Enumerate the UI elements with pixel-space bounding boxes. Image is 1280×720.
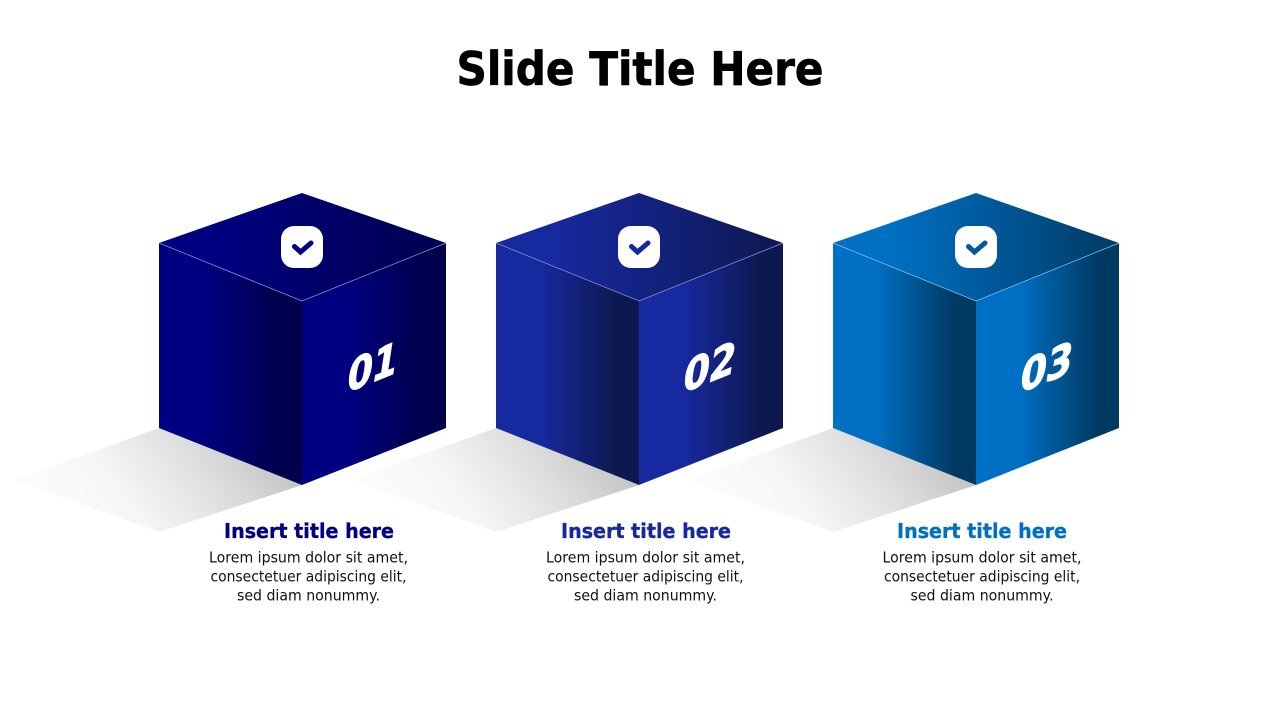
top face 3 xyxy=(833,193,1119,301)
caption body 3 xyxy=(882,548,1082,604)
top face 1 xyxy=(159,193,446,301)
number 03: 03 xyxy=(1021,331,1073,403)
left face 2 xyxy=(496,243,639,485)
shadow 1 xyxy=(15,428,302,532)
right face 1 xyxy=(302,243,446,485)
left face 1 xyxy=(159,243,302,485)
number 02: 02 xyxy=(684,331,736,403)
right face 3 xyxy=(976,243,1119,485)
caption body 2: consectetuer adipiscing elit, xyxy=(548,568,744,586)
caption 1 xyxy=(209,519,408,604)
edge highlights 3 xyxy=(833,243,1119,301)
caption body 1: consectetuer adipiscing elit, xyxy=(210,568,406,586)
cube 1 group xyxy=(15,193,446,532)
caption body 1 xyxy=(209,548,408,604)
edge highlights 1 xyxy=(159,243,446,301)
shadow 2 xyxy=(352,428,639,532)
title: Slide Title Here xyxy=(456,42,824,96)
icon: check badge 2 xyxy=(618,226,660,268)
icon: check badge 3 xyxy=(955,226,997,268)
caption body 3: consectetuer adipiscing elit, xyxy=(884,568,1080,586)
icon: check badge 1 xyxy=(281,226,323,268)
left face 3 xyxy=(833,243,976,485)
top face 2 xyxy=(496,193,783,301)
caption body 3: Lorem ipsum dolor sit amet, xyxy=(882,548,1082,566)
shadow 3 xyxy=(689,428,976,532)
caption 2 xyxy=(546,519,745,604)
cube 2 group xyxy=(352,193,783,532)
caption body 2: Lorem ipsum dolor sit amet, xyxy=(546,548,745,566)
number 01: 01 xyxy=(348,332,398,403)
caption heading 3: Insert title here xyxy=(897,519,1067,543)
caption body 2 xyxy=(546,548,745,604)
caption body 3: sed diam nonummy. xyxy=(910,586,1054,604)
caption body 1: Lorem ipsum dolor sit amet, xyxy=(209,548,408,566)
caption 3 xyxy=(882,519,1082,604)
caption heading 2: Insert title here xyxy=(561,519,731,543)
right face 2 xyxy=(639,243,783,485)
caption body 1: sed diam nonummy. xyxy=(237,586,380,604)
cube 3 group xyxy=(689,193,1119,532)
edge highlights 2 xyxy=(496,243,783,301)
caption body 2: sed diam nonummy. xyxy=(574,586,717,604)
caption heading 1: Insert title here xyxy=(224,519,394,543)
